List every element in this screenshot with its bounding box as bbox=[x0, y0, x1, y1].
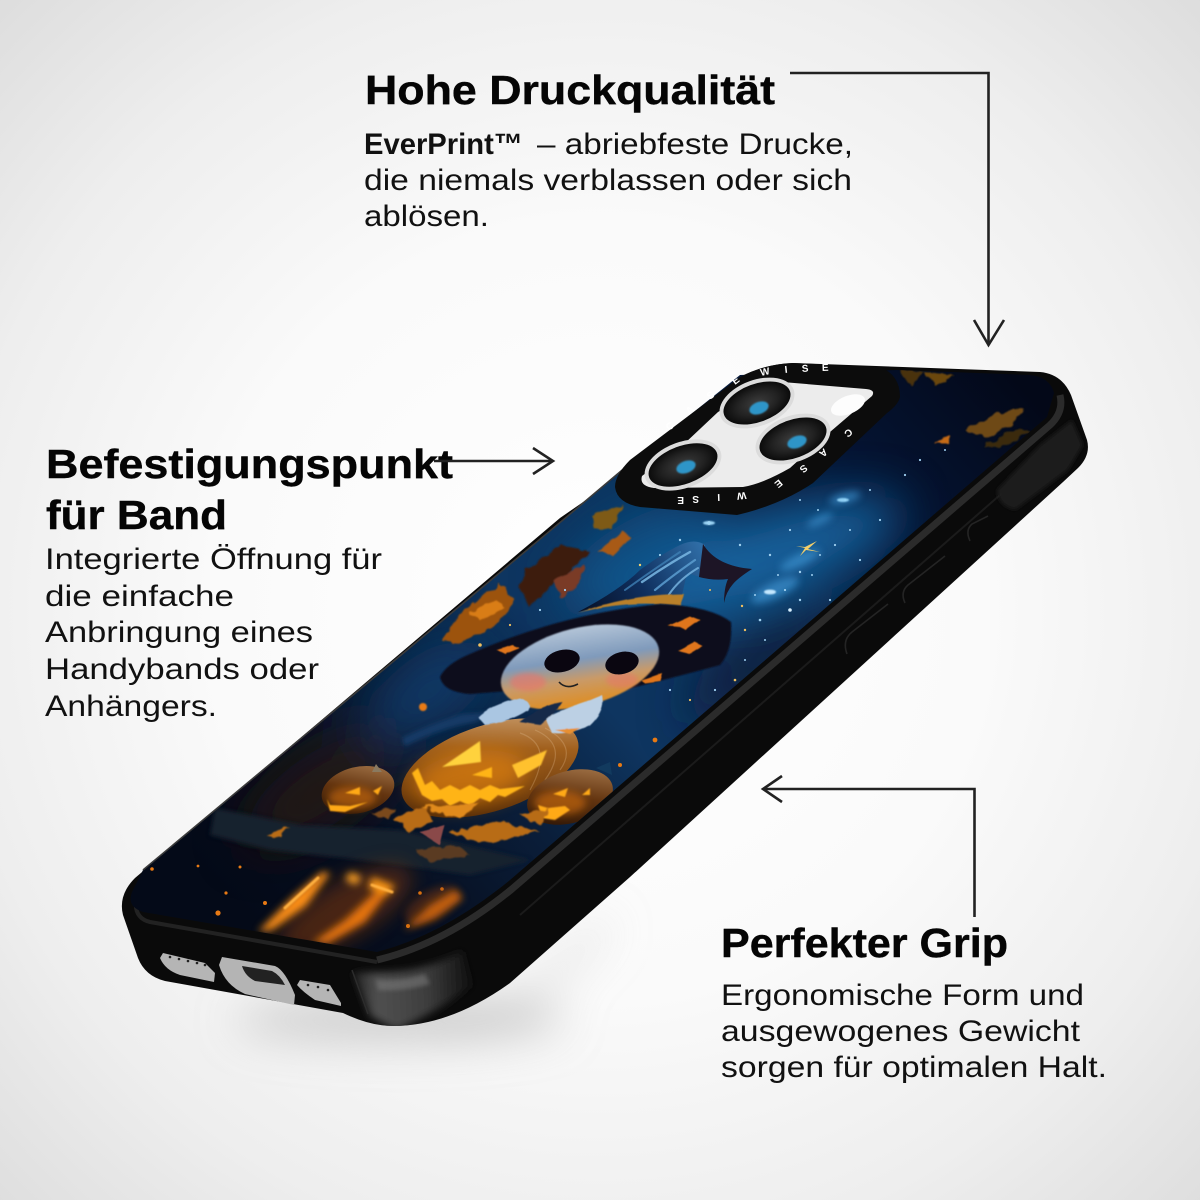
bottom corner metallic sheen bbox=[352, 954, 468, 1026]
callout: Hohe Druckqualität bbox=[364, 67, 853, 233]
body text: Anbringung eines bbox=[45, 616, 313, 649]
screen edge bbox=[143, 455, 640, 870]
body text: Anhängers. bbox=[45, 690, 217, 723]
lens 3 bbox=[638, 430, 728, 500]
body text bbox=[721, 979, 1107, 1084]
side rim highlight bbox=[136, 395, 1083, 962]
lens 2 bbox=[748, 404, 838, 474]
body text: EverPrint™ bbox=[364, 128, 523, 161]
mouth bbox=[559, 682, 578, 687]
body text bbox=[364, 128, 853, 233]
hands and body bbox=[478, 695, 603, 734]
callout: Perfekter Grip bbox=[721, 920, 1107, 1084]
case body bbox=[122, 363, 1088, 1026]
left jack-o-lantern bbox=[322, 764, 394, 814]
heading: Perfekter Grip bbox=[721, 920, 1008, 966]
body text: die einfache bbox=[45, 580, 234, 613]
arrow: strap attachment bbox=[434, 448, 553, 474]
body text: sorgen für optimalen Halt. bbox=[721, 1051, 1107, 1084]
body text: – abriebfeste Drucke, bbox=[537, 128, 853, 161]
milky way glow bbox=[226, 471, 915, 871]
camera ring bbox=[615, 363, 900, 515]
hat star patches bbox=[497, 616, 703, 683]
body text bbox=[45, 543, 382, 723]
charging port bbox=[219, 957, 295, 1005]
hat brim bbox=[440, 604, 731, 694]
heading: Hohe Druckqualität bbox=[365, 67, 775, 113]
body text: Handybands oder bbox=[45, 653, 319, 686]
body text: die niemals verblassen oder sich bbox=[364, 164, 852, 197]
panel: phone case product bbox=[100, 340, 1100, 1042]
CASEWISE bottom lettering: CASEWISE bbox=[677, 426, 854, 505]
callout: Befestigungspunkt für Band bbox=[45, 441, 453, 723]
witch character bbox=[402, 542, 752, 746]
right speaker grille bbox=[297, 980, 341, 1006]
heading: für Band bbox=[46, 492, 227, 538]
arrow: grip bbox=[763, 776, 974, 917]
eyes bbox=[544, 650, 580, 672]
hat band bbox=[578, 594, 684, 613]
heading bbox=[46, 441, 453, 538]
printed artwork bbox=[130, 370, 1054, 952]
body text: ablösen. bbox=[364, 200, 489, 233]
water reflections bbox=[255, 856, 467, 948]
body text: Ergonomische Form und bbox=[721, 979, 1084, 1012]
body text: ausgewogenes Gewicht bbox=[721, 1015, 1080, 1048]
arrow: print quality bbox=[790, 73, 1004, 345]
CASEWISE top lettering: CASEWISE bbox=[664, 363, 829, 433]
ground and leaf litter bbox=[210, 804, 548, 875]
ember sparks bbox=[150, 703, 657, 928]
camera island bbox=[615, 363, 900, 515]
blush bbox=[510, 673, 546, 691]
body text: Integrierte Öffnung für bbox=[45, 543, 382, 576]
face bbox=[500, 623, 660, 711]
camera plate bbox=[642, 381, 873, 488]
drop shadow bbox=[235, 915, 615, 1042]
hat cone bbox=[578, 542, 752, 612]
left speaker grille bbox=[160, 953, 215, 982]
nebula patches bbox=[748, 489, 862, 608]
night sky bbox=[130, 370, 1054, 952]
falling leaves bbox=[442, 368, 1030, 642]
heading: Befestigungspunkt bbox=[46, 441, 453, 487]
robe sweep bbox=[402, 712, 495, 746]
main jack-o-lantern bbox=[401, 718, 578, 820]
right jack-o-lantern bbox=[527, 762, 613, 825]
stars bbox=[478, 449, 946, 701]
lens 1 bbox=[712, 368, 802, 438]
side buttons bbox=[845, 516, 988, 654]
